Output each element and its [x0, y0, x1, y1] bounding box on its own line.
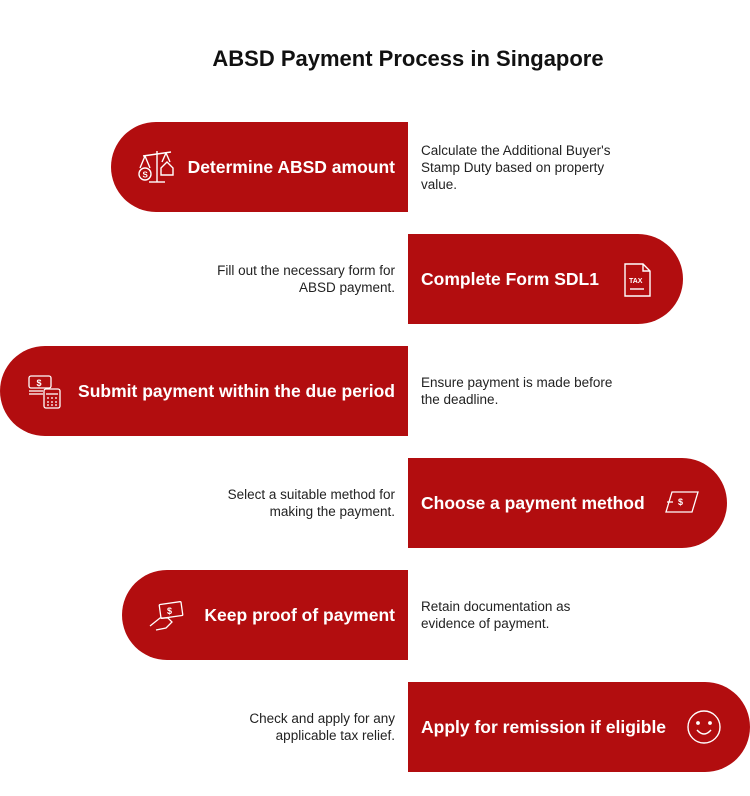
step 2 bar: Complete Form SDL1: [421, 268, 599, 288]
step 4 bar: [408, 458, 727, 548]
step 6 bar: [408, 682, 750, 772]
icon: scale: S: [142, 170, 148, 180]
step 5 description: Retain documentation as evidence of payment.: [421, 599, 570, 631]
icon: tax form: TAX: [629, 278, 643, 285]
icon: hand with money: [150, 601, 184, 631]
step 1 bar: [111, 122, 408, 212]
icon: tax form: [624, 263, 651, 297]
icon: hand with money: $: [167, 606, 172, 616]
icon: scale: [138, 151, 174, 183]
step 2 bar: [408, 234, 683, 324]
step 6 bar: Apply for remission if eligible: [421, 716, 666, 736]
icon: money and calculator: [28, 375, 61, 409]
step 3 bar: Submit payment within the due period: [78, 380, 395, 400]
step 3 bar: [0, 346, 408, 436]
step 3 description: Ensure payment is made before the deadline.: [421, 375, 612, 407]
step 4 description: Select a suitable method for making the payment.: [228, 487, 395, 519]
title: ABSD Payment Process in Singapore: [212, 46, 604, 71]
icon: smiley: [687, 710, 721, 744]
step 1 description: Calculate the Additional Buyer's Stamp Duty based on property value.: [421, 143, 610, 192]
icon: card payment: [665, 491, 699, 513]
icon: card payment: $: [678, 497, 683, 507]
step 5 bar: Keep proof of payment: [204, 604, 395, 624]
step 1 bar: Determine ABSD amount: [188, 156, 395, 176]
icon: money and calculator: $: [36, 378, 42, 388]
step 6 description: Check and apply for any applicable tax relief.: [249, 711, 395, 743]
step 5 bar: [122, 570, 408, 660]
step 4 bar: Choose a payment method: [421, 492, 645, 512]
step 2 description: Fill out the necessary form for ABSD payment.: [217, 263, 395, 295]
